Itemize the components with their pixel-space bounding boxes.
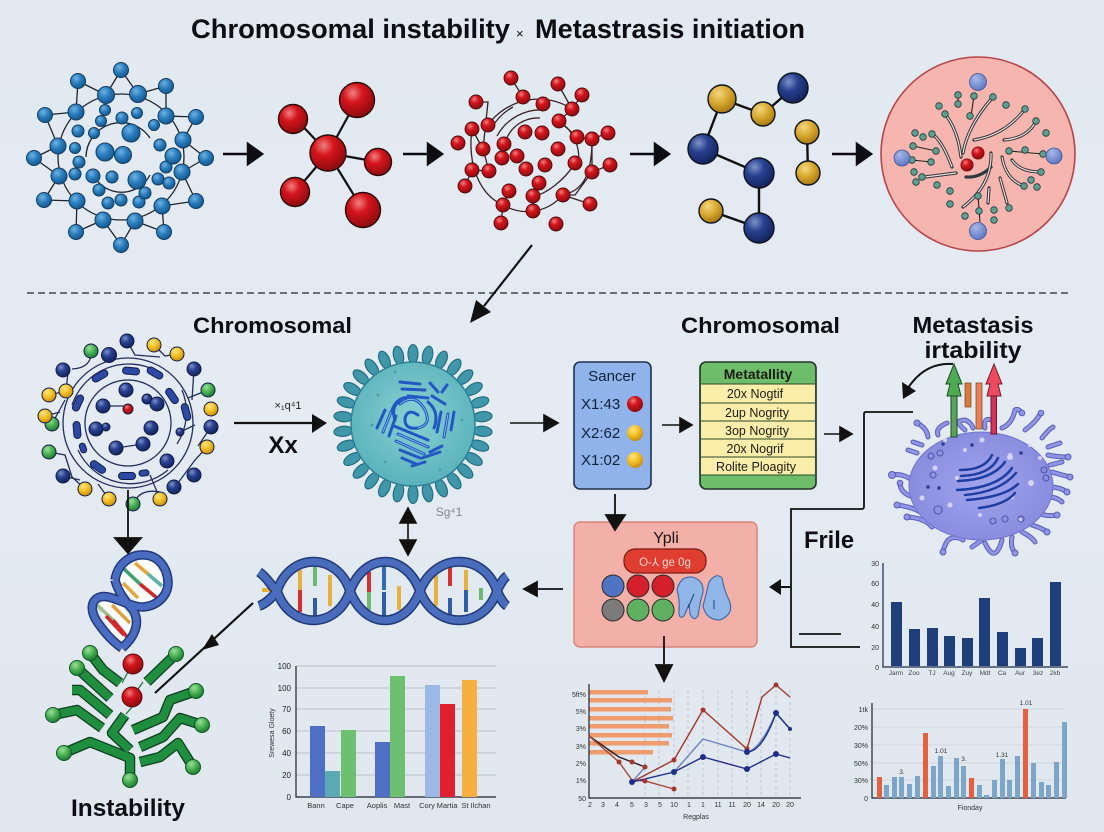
- arrow: DNA to green figure: [155, 603, 253, 693]
- panel: Sancer: X2:62: [581, 425, 620, 442]
- bar chart: grouped colored bars: [269, 662, 496, 810]
- bar chart: grouped colored bars: 60: [282, 727, 292, 736]
- line chart: 11: [714, 802, 722, 809]
- bar chart: grouped colored bars: Cory: [419, 801, 435, 810]
- icon: teal spiked cell: [333, 344, 493, 504]
- bar chart: grouped colored bars: 40: [282, 749, 292, 758]
- line chart: 1%: [576, 778, 586, 785]
- icon: red star molecule: [278, 82, 392, 228]
- bar chart: right navy bars: Jarm: [889, 670, 903, 677]
- bar chart: right navy bars: TJ: [928, 670, 936, 677]
- bar chart: red and blue bars: Fionday: [958, 805, 983, 812]
- arrow: [403, 144, 442, 164]
- title: Chromosomal instability: [191, 14, 510, 44]
- bar chart: right navy bars: Zoo: [908, 670, 920, 677]
- bar chart: right navy bars: Aug: [943, 670, 955, 677]
- arrow: [524, 582, 563, 596]
- line chart: 3%: [576, 726, 586, 733]
- title: ×: [516, 26, 524, 41]
- line chart: 3: [601, 802, 605, 809]
- line chart: 3: [644, 802, 648, 809]
- line chart: 2%: [576, 761, 586, 768]
- arrow to teal cell with labels: Xx: [268, 432, 298, 459]
- bar chart: grouped colored bars: 70: [282, 705, 292, 714]
- bar chart: red and blue bars: 50%: [854, 761, 868, 768]
- icon: green branching protein: [46, 646, 210, 788]
- bar chart: right navy bars: 20: [871, 645, 879, 652]
- bar chart: red and blue bars: 1.01: [935, 748, 948, 755]
- line chart: 14: [757, 802, 765, 809]
- panel: Metatallity table: [700, 362, 816, 489]
- panel: Ypli: O-⅄ ge 0g: [639, 557, 691, 569]
- line chart: 10: [670, 802, 678, 809]
- arrow: [662, 418, 692, 432]
- panel: Ypli: Ypli: [653, 530, 679, 547]
- panel: Metatallity table: 2up Nogrity: [725, 406, 790, 420]
- bar chart: red and blue bars: 30%: [854, 778, 868, 785]
- label Instability: Instability: [71, 795, 186, 822]
- line chart: 1: [687, 802, 691, 809]
- bar chart: right navy bars: 40: [871, 602, 879, 609]
- line chart: 5ft%: [572, 692, 586, 699]
- heading: Metastasis irtability: irtability: [924, 337, 1022, 363]
- panel: Metatallity table: 3op Nogrity: [725, 424, 790, 438]
- bar chart: red and blue bars: 1.31: [996, 752, 1009, 759]
- line chart: 20: [786, 802, 794, 809]
- bar chart: red and blue bars: 3.: [899, 769, 905, 776]
- bar chart: right navy bars: 0: [875, 665, 879, 672]
- line chart: 3%: [576, 744, 586, 751]
- bar chart: grouped colored bars: Bann: [307, 801, 325, 810]
- arrow: [824, 427, 852, 441]
- dashed divider: [27, 292, 1072, 294]
- panel: Sancer: X1:02: [581, 452, 620, 469]
- panel: Sancer: X1:43: [581, 396, 620, 413]
- heading: Metastasis irtability: Metastasis: [912, 312, 1034, 338]
- label Frile: Frile: [804, 527, 854, 554]
- bar chart: grouped colored bars: 20: [282, 771, 292, 780]
- bar chart: red and blue bars: 0: [864, 796, 868, 803]
- arrows rising out of purple cell: [946, 364, 1002, 437]
- bar chart: grouped colored bars: Srewesa Gloety: [269, 708, 276, 758]
- line chart: 5: [658, 802, 662, 809]
- icon: large DNA helix: [259, 562, 507, 620]
- panel: Metatallity table: 20x Nogtif: [727, 387, 784, 401]
- curved arrow: [902, 364, 953, 399]
- panel: Metatallity table: Metatallity: [724, 366, 792, 382]
- bar chart: right navy bars: Mdt: [980, 670, 991, 677]
- bar chart: red and blue bars: 1tk: [859, 707, 868, 714]
- arrow: Sancer down to panel: [606, 494, 625, 530]
- heading: Metastasis irtability: [912, 312, 1034, 363]
- bar chart: grouped colored bars: Cape: [336, 801, 354, 810]
- small label Sg: Sg⁴1: [436, 505, 463, 519]
- line chart: 2: [588, 802, 592, 809]
- bar chart: red and blue bars: 30%: [854, 743, 868, 750]
- bar chart: right navy bars: 3ez: [1033, 670, 1043, 677]
- line chart: 20: [743, 802, 751, 809]
- title: [191, 14, 805, 44]
- double arrow: [400, 508, 416, 555]
- line chart: Regplas: [683, 814, 709, 821]
- line chart: 5%: [576, 709, 586, 716]
- line chart: [572, 682, 801, 821]
- icon: gold and navy molecule: [688, 73, 820, 243]
- bar chart: right navy bars: Ca: [998, 670, 1007, 677]
- line chart: 20: [772, 802, 780, 809]
- bar chart: right navy bars: 2kb: [1050, 670, 1061, 677]
- arrow: [832, 144, 871, 164]
- icon: purple cell: [888, 409, 1073, 556]
- heading: Chromosomal right: Chromosomal: [681, 313, 840, 338]
- line chart: 50: [578, 796, 586, 803]
- icon: small DNA helix: [92, 555, 168, 648]
- panel: Ypli: [574, 522, 757, 647]
- icon: chromosome ring cell: [38, 334, 218, 511]
- icon: red molecular cluster: [451, 71, 617, 231]
- arrow: [630, 144, 669, 164]
- arrow head into panel: [769, 579, 781, 595]
- title: Metastrasis initiation: [535, 14, 805, 44]
- arrow: [510, 415, 558, 431]
- panel: Metatallity table: 20x Nogrif: [727, 442, 784, 456]
- arrow: ring to DNA: [115, 490, 141, 553]
- bar chart: grouped colored bars: 0: [287, 793, 292, 802]
- line chart: 5: [630, 802, 634, 809]
- line chart: 11: [728, 802, 736, 809]
- bar chart: red and blue bars: 20%: [854, 725, 868, 732]
- icon: pink cell with radiating filaments: [881, 57, 1075, 251]
- bar chart: right navy bars: 40: [871, 624, 879, 631]
- bar chart: right navy bars: Aur: [1015, 670, 1026, 677]
- heading: Chromosomal left: Chromosomal: [193, 313, 352, 338]
- bar chart: right navy bars: 30: [871, 561, 879, 568]
- bar chart: red and blue bars: [854, 700, 1067, 812]
- line chart: 4: [615, 802, 619, 809]
- bar chart: grouped colored bars: Aoplis: [367, 801, 387, 810]
- bar chart: right navy bars: Zuy: [962, 670, 973, 677]
- bar chart: grouped colored bars: 100: [278, 684, 292, 693]
- arrow to teal cell with labels: [234, 400, 327, 459]
- bar chart: red and blue bars: 3.: [961, 756, 967, 763]
- bar chart: grouped colored bars: St Ilchan: [461, 801, 491, 810]
- bar chart: grouped colored bars: 100: [278, 662, 292, 671]
- connector frame to panel: [778, 412, 913, 647]
- icon: blue molecular cluster: [26, 62, 214, 252]
- arrow: diagonal down to teal cell: [484, 245, 532, 306]
- panel: Metatallity table: Rolite Ploagity: [716, 460, 797, 474]
- arrow: panel down to line chart: [656, 636, 672, 681]
- panel: Sancer: Sancer: [588, 368, 636, 385]
- bar chart: grouped colored bars: Mast: [394, 801, 411, 810]
- arrow: [223, 144, 262, 164]
- arrow to teal cell with labels: ×₁q⁴1: [274, 400, 302, 412]
- bar chart: red and blue bars: 1.01: [1020, 700, 1033, 707]
- bar chart: grouped colored bars: Martia: [437, 801, 458, 810]
- bar chart: right navy bars: 60: [871, 581, 879, 588]
- line chart: 1: [701, 802, 705, 809]
- bar chart: right navy bars: [871, 561, 1068, 677]
- panel: Sancer: [574, 362, 651, 489]
